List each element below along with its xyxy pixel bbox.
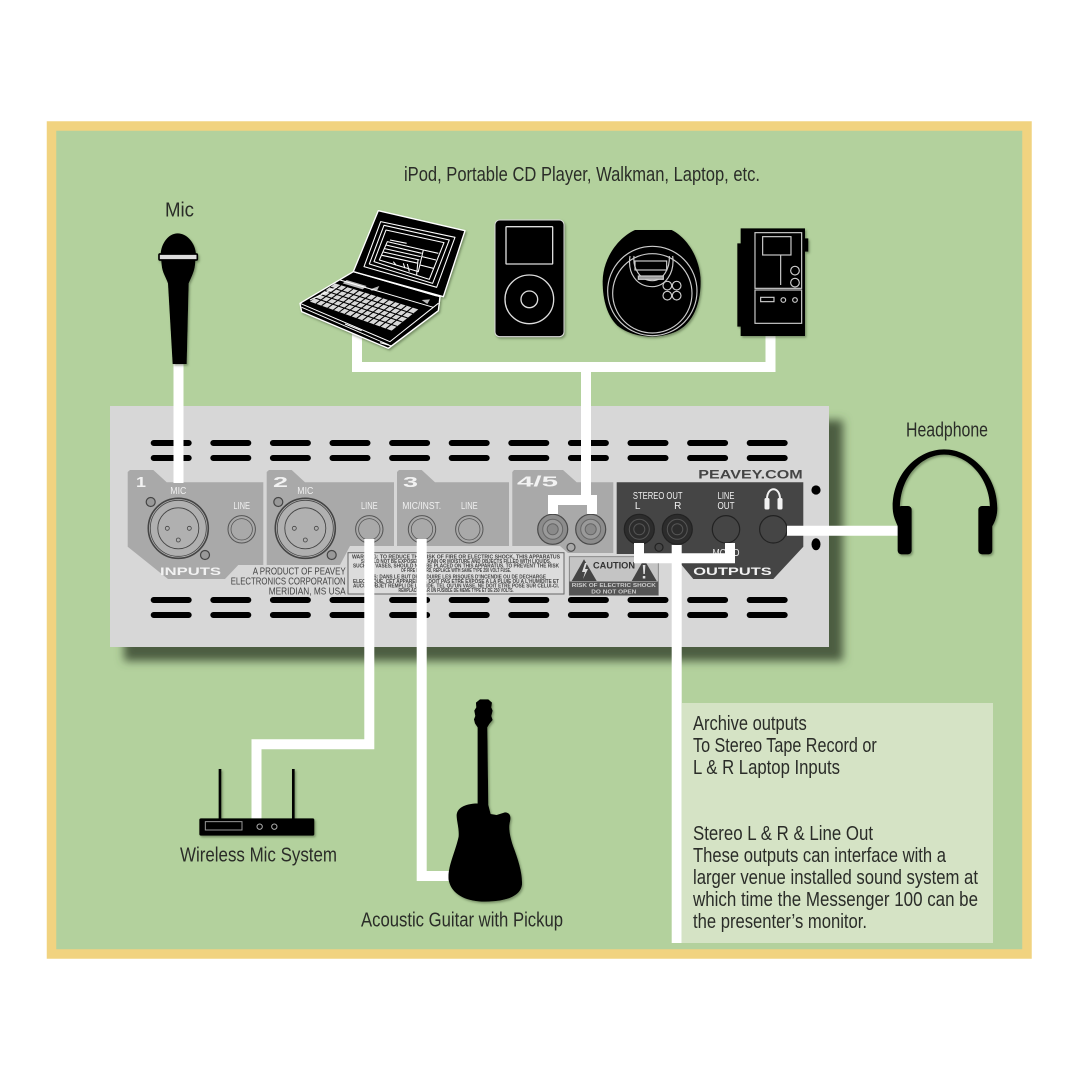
input section 3: LINE [461,501,478,512]
notes text: the presenter’s monitor. [693,911,867,933]
notes text: To Stereo Tape Record or [693,735,877,757]
input section 1: 1 [136,474,146,491]
XLR connector 1 [146,498,210,560]
cable: guitar to input 3 [422,539,452,876]
notes text: Stereo L & R & Line Out [693,823,873,845]
input section 1: INPUTS [160,566,221,578]
label: portable devices: iPod, Portable CD Player, Walkman, Laptop, etc. [404,164,760,186]
outputs section: OUT [718,501,734,512]
panel body [110,406,829,647]
jacks of section 3 [408,516,483,543]
input section 2: MIC [297,486,313,497]
label: mic: Mic [165,200,194,222]
laptop base [300,272,440,348]
notes text: Archive outputs [693,713,807,735]
icon: headphone jack symbol [764,489,782,510]
input section 1: LINE [233,501,250,512]
icon: acoustic guitar [448,699,522,902]
caution label: RISK OF ELECTRIC SHOCK [572,583,656,589]
input section 3: MIC/INST. [402,501,441,512]
cable: portable devices to input 4/5 [357,330,770,514]
outputs section [617,482,803,579]
cable: line 2 to wireless mic [256,539,369,820]
manufacturer text [231,565,346,597]
outputs section: R [674,501,681,512]
outputs section: MONO [712,548,740,559]
label: acoustic guitar: Acoustic Guitar with Pickup [361,910,563,932]
notes text: L & R Laptop Inputs [693,757,840,779]
notes text: These outputs can interface with a [693,845,947,867]
label: wireless mic system: Wireless Mic System [180,845,337,867]
icon: portable CD player [603,230,701,337]
XLR connector 2 [274,498,336,560]
caution label [569,557,658,596]
caution label: CAUTION [593,560,635,570]
icon: iPod [495,220,564,337]
outputs section: STEREO OUT [633,491,683,502]
icon: laptop [300,211,465,348]
manufacturer text: A PRODUCT OF PEAVEY [253,565,346,577]
input section 4/5 [512,470,613,553]
notes text: which time the Messenger 100 can be [692,889,978,911]
input section 1: MIC [170,486,186,497]
warning label: AVIS: DANS LE BUT DE REDUIRE LES RISQUES D'INCENDIE OU DE DECHARGE [366,574,547,580]
icon: microphone [159,233,197,364]
line jack 2 [356,516,383,543]
caution label: DO NOT OPEN [591,590,636,596]
manufacturer text: MERIDIAN, MS USA [269,585,346,597]
line jack 1 [228,516,255,543]
icon: headphones [893,449,997,554]
label: headphone: Headphone [906,420,988,442]
warning label: SHOULD NOT BE EXPOSED TO RAIN OR MOISTURE AND OBJECTS FILLED WITH LIQUIDS, [361,559,552,565]
warning label: AUCUN OBJET REMPLI DE LIQUIDE, TEL QU'UN VASE, NE DOIT ETRE POSE SUR CELUI-CI. [353,584,560,590]
input section 2: LINE [361,501,378,512]
warning label: OF FIRE HAZARD, REPLACE WITH SAME TYPE 250 VOLT FUSE. [401,568,511,574]
cable: mic to input 1 [174,350,184,483]
input section 2: 2 [273,474,288,491]
RCA inputs [538,514,606,551]
laptop keyboard [310,283,418,331]
yellow frame and green background [52,126,1027,954]
outputs section: LINE [718,491,735,502]
outputs section: OUTPUTS [693,566,772,578]
outputs section: L [635,501,641,512]
white cables [178,330,900,943]
brand label: PEAVEY.COM [698,467,803,481]
input section 3 [397,470,509,546]
laptop screen [353,211,465,297]
input section 2 [267,470,394,565]
input section 1 [128,470,263,579]
notes text [692,713,978,933]
input section 3: 3 [403,474,418,491]
manufacturer text: ELECTRONICS CORPORATION [231,575,346,587]
warning label: WARNING: TO REDUCE THE RISK OF FIRE OR ELECTRIC SHOCK, THIS APPARATUS [352,554,561,560]
input section 4/5: 4/5 [517,474,558,491]
mounting holes [811,485,821,550]
icon: walkman cassette player [737,228,808,336]
ventilation slots [154,443,785,615]
warning label: REMPLACER PAR UN FUSIBLE DE MEME TYPE ET DE 250 VOLTS. [398,588,514,594]
warning label [348,553,564,594]
icon: wireless receiver [199,769,314,836]
notes box [682,703,993,943]
output connectors [624,514,787,551]
notes text: larger venue installed sound system at [693,867,978,889]
cable: stereo outputs to external [639,543,730,943]
warning label: ELECTRIQUE, CET APPAREIL NE DOIT PAS ETRE EXPOSE A LA PLUIE OU A L'HUMIDITE ET [353,579,559,585]
panel: rear panel of amplifier [110,406,829,647]
warning label: SUCH AS VASES, SHOULD NOT BE PLACED ON THIS APPARATUS. TO PREVENT THE RISK [353,564,559,570]
cable: headphone output [787,526,900,536]
